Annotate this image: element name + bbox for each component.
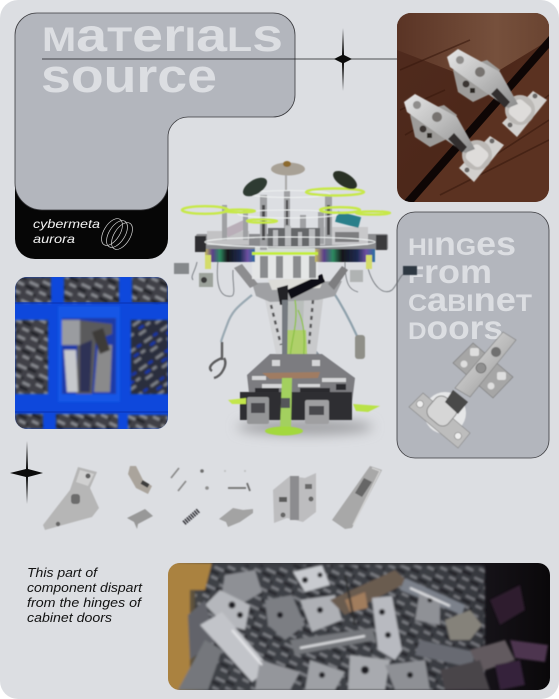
part: link arm: [219, 508, 253, 527]
neon rings: [182, 188, 390, 223]
connector: [355, 335, 365, 359]
icon: lower hinge: [404, 94, 504, 182]
label: cybermeta aurora: cybermeta: [33, 217, 100, 231]
part: spring: [184, 510, 199, 523]
black label panel: [15, 170, 168, 259]
part: hook: [127, 466, 153, 529]
part: pins and screws: [171, 468, 250, 491]
panel: materials source heading: [15, 9, 295, 210]
heading: hinges from cabinet doors: Doors: [408, 309, 503, 346]
heading: hinges from cabinet doors: HInGes: [408, 225, 516, 262]
caption text: from the hinges of: [27, 595, 143, 610]
posts: [222, 190, 332, 250]
claw: [210, 342, 225, 378]
photo: blue parts bins: [15, 277, 168, 429]
part: arm: [332, 466, 382, 529]
middle row bins: [15, 320, 48, 394]
base: [247, 354, 355, 402]
upper deck: [196, 234, 388, 250]
panel: hinges from cabinet doors: [397, 212, 549, 458]
label: cybermeta aurora: aurora: [33, 232, 75, 246]
centre bin parts: [62, 318, 116, 394]
hole and highlight details: [228, 572, 432, 678]
icon: upper hinge: [447, 49, 547, 137]
heading: hinges from cabinet doors: From: [408, 253, 492, 290]
photo: hinges on wood: [397, 13, 549, 202]
photo: pile of hinges: [168, 563, 550, 690]
caption text: cabinet doors: [27, 610, 113, 625]
top discs: [271, 162, 305, 176]
top row bins: [15, 277, 51, 303]
heading: materials: MaTer IaLs: [42, 9, 283, 61]
struts: [234, 264, 258, 288]
mid posts: [252, 255, 318, 279]
part: mounting plate: [273, 473, 316, 523]
hub: [252, 281, 342, 302]
icon: aurora rings: [97, 215, 137, 253]
heading: hinges from cabinet doors: CaBIneT: [408, 281, 532, 318]
exploded hinge components: [43, 466, 382, 530]
connector line with star: [42, 28, 397, 91]
ground shadow: [237, 419, 373, 435]
caption text: component dispart: [27, 580, 143, 595]
caption text: This part of: [27, 565, 98, 580]
column: [264, 290, 292, 354]
sensors: [174, 263, 189, 274]
heading: hinges from cabinet doors: [408, 225, 532, 346]
part: cup plate: [43, 467, 99, 530]
cables: [192, 260, 407, 368]
bottom row bins: [15, 414, 43, 429]
icon: cabinet hinge: [409, 332, 516, 448]
robot sculpture: [174, 161, 417, 436]
heading: source: source: [41, 49, 217, 102]
glass deck lines: [205, 190, 375, 247]
star ornament: [10, 441, 43, 504]
